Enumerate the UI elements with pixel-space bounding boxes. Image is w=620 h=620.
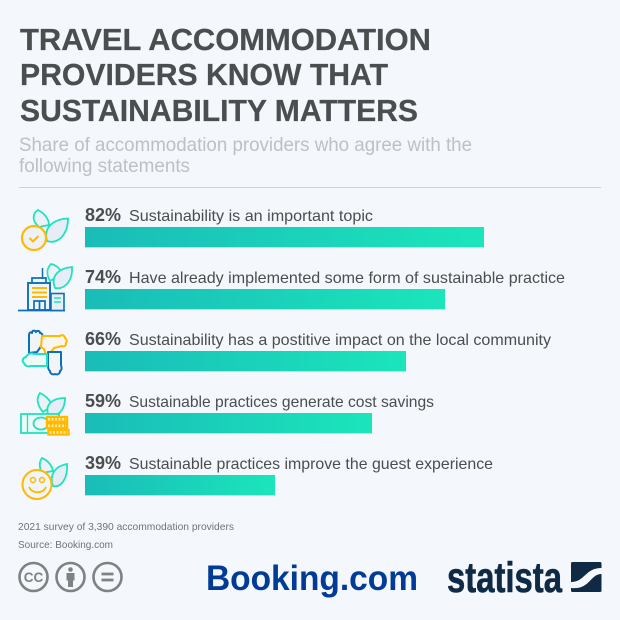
title: TRAVEL ACCOMMODATION [20,23,431,57]
icon: creative commons licence: CC [24,570,43,585]
icon: building with leaves [18,264,72,310]
subtitle [19,134,472,177]
label: Sustainability is an important topic [129,208,373,225]
row: 82% [22,205,484,250]
icon: leaves with check badge [22,210,68,250]
bar [85,289,445,309]
value: 74% [85,267,121,287]
label: Have already implemented some form of sustainable practice [129,270,565,287]
subtitle: Share of accommodation providers who agree with the [19,134,472,156]
icon: creative commons licence [20,563,122,591]
bar [85,227,484,247]
title [20,23,431,128]
value: 59% [85,391,121,411]
label: Sustainability has a postitive impact on the local community [129,332,551,349]
footnote: 2021 survey of 3,390 accommodation providers [18,521,234,533]
value: 82% [85,205,121,225]
row: 66% [23,329,551,374]
row: 59% [21,391,434,435]
icon: smiley with leaves [22,458,67,499]
label: Sustainable practices generate cost savings [129,394,434,411]
value: 39% [85,453,121,473]
title: SUSTAINABILITY MATTERS [20,94,418,128]
label: Sustainable practices improve the guest experience [129,456,493,473]
bar [85,475,275,495]
bar [85,351,406,371]
logo: statista: statista [447,554,563,602]
row: 39% [22,453,493,499]
subtitle: following statements [19,155,190,177]
icon: four joined hands [23,331,67,374]
source: Source: Booking.com [18,539,113,551]
title: PROVIDERS KNOW THAT [20,58,388,92]
icon: banknote, coins and leaves [21,393,69,435]
bar [85,413,372,433]
row: 74% [18,264,565,310]
value: 66% [85,329,121,349]
logo: Booking.com: Booking.com [206,559,418,598]
